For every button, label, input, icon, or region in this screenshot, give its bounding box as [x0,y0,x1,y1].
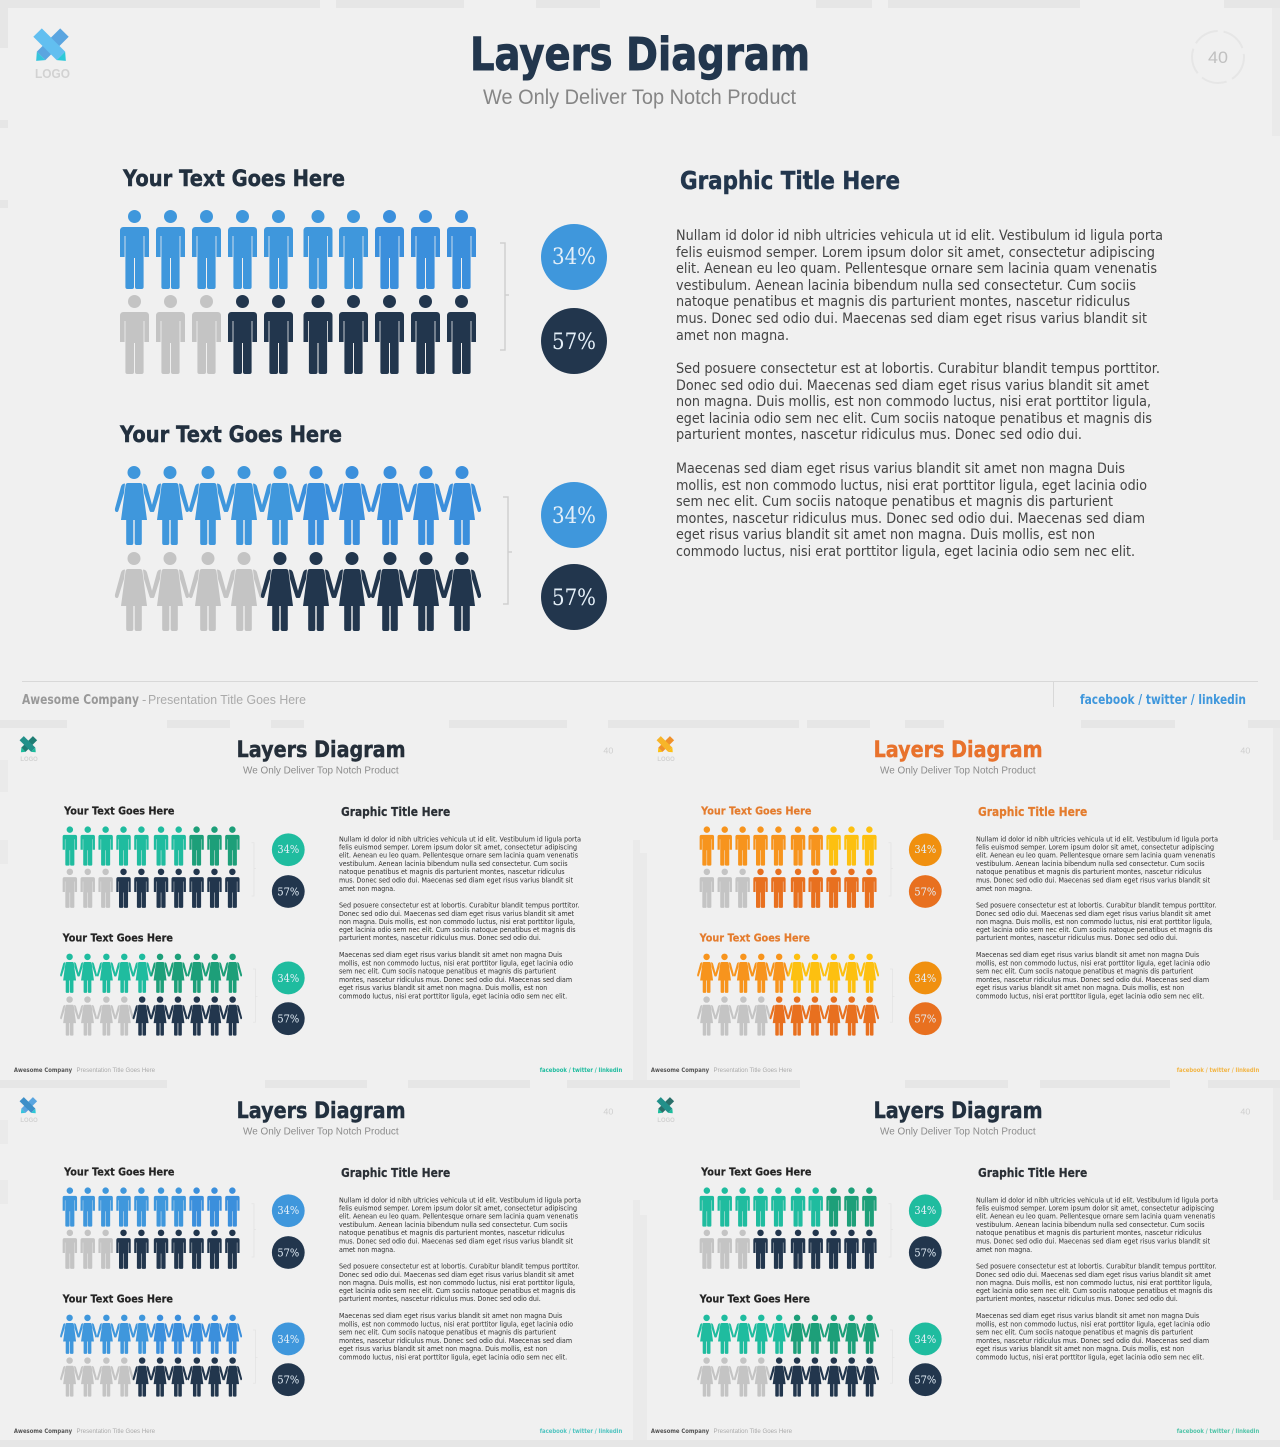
graphic title: Graphic Title Here [978,1165,1087,1180]
body text: non magna. Duis mollis, est non commodo luctus, nisi erat porttitor ligula, [339,917,575,926]
footer links: facebook / twitter / linkedin [1177,1066,1260,1074]
body text: parturient montes, nascetur ridiculus mus. Donec sed odio dui. [339,933,541,942]
pictogram: women row 1 [697,954,879,993]
icon: logo: LOGO [20,756,38,763]
body text: eget risus varius blandit sit amet non magna. Duis mollis, est non [976,983,1184,992]
heading: men chart: Your Text Goes Here [700,804,811,817]
icon: logo: LOGO [657,1117,675,1124]
stat: 57% men [272,1236,305,1269]
body text: Nullam id dolor id nibh ultricies vehicula ut id elit. Vestibulum id ligula porta [339,834,581,843]
stat: 34% women: 34% [914,972,936,985]
title: Layers Diagram [874,1098,1043,1124]
stat: 34% men: 34% [277,843,299,856]
heading: women chart: Your Text Goes Here [62,1293,173,1306]
title: Layers Diagram [237,1098,406,1124]
page number badge: 40 [1208,48,1228,67]
pictogram: men row 2 [700,869,877,908]
body text: sem nec elit. Cum sociis natoque penatibus et magnis dis parturient [976,966,1193,975]
bracket: women [890,969,894,1022]
body text: eget lacinia odio sem nec elit. Cum sociis natoque penatibus et magnis dis [976,1286,1213,1295]
body text: mus. Donec sed odio dui. Maecenas sed diam eget risus varius blandit sit [976,876,1210,885]
body text: non magna. Duis mollis, est non commodo luctus, nisi erat porttitor ligula, [976,917,1212,926]
page number: 40 [1240,1106,1251,1116]
icon: logo: LOGO [35,66,70,81]
stat: 57% men [541,308,607,374]
body text: natoque penatibus et magnis dis parturient montes, nascetur ridiculus [339,1228,565,1237]
stat: 57% women [272,1363,305,1396]
body text: Maecenas sed diam eget risus varius blandit sit amet non magna Duis [339,1311,562,1320]
graphic title: Graphic Title Here [978,804,1087,819]
body text: eget risus varius blandit sit amet non magna. Duis mollis, est non [976,1344,1184,1353]
heading: men chart: Your Text Goes Here [63,804,174,817]
stat: 34% men: 34% [552,245,596,270]
footer left [14,1066,155,1074]
body text: Sed posuere consectetur est at lobortis. Curabitur blandit tempus porttitor. [339,900,580,909]
stat: 57% men [272,875,305,908]
stat: 57% women: 57% [277,1374,299,1387]
body text: mollis, est non commodo luctus, nisi erat porttitor ligula, eget lacinia odio [976,959,1210,968]
pictogram: men row 2 [63,1230,240,1269]
body text: elit. Aenean eu leo quam. Pellentesque ornare sem lacinia quam venenatis [339,851,578,860]
body text: eget lacinia odio sem nec elit. Cum sociis natoque penatibus et magnis dis [976,925,1213,934]
body text: commodo luctus, nisi erat porttitor ligula, eget lacinia odio sem nec elit. [339,1352,567,1361]
footer left [651,1427,792,1435]
body text: eget lacinia odio sem nec elit. Cum sociis natoque penatibus et magnis dis [339,925,576,934]
stat: 34% women [909,1323,942,1355]
pictogram: women row 2 [697,1357,879,1397]
body text: Nullam id dolor id nibh ultricies vehicula ut id elit. Vestibulum id ligula porta [339,1195,581,1204]
bracket: women [253,1330,257,1383]
page number badge [1192,31,1244,83]
stat: 34% men [909,833,942,866]
body text: vestibulum. Aenean lacinia bibendum nulla sed consectetur. Cum sociis [676,278,1136,294]
stat: 57% women [909,1363,942,1396]
subtitle: We Only Deliver Top Notch Product [243,766,399,777]
body text [339,1195,581,1361]
footer left [22,692,306,708]
stat: 57% women: 57% [552,586,596,611]
body text: natoque penatibus et magnis dis parturient montes, nascetur ridiculus [339,867,565,876]
body text: sem nec elit. Cum sociis natoque penatibus et magnis dis parturient [339,1327,556,1336]
footer links: facebook / twitter / linkedin [540,1066,623,1074]
subtitle: We Only Deliver Top Notch Product [243,1127,399,1138]
body text: felis euismod semper. Lorem ipsum dolor sit amet, consectetur adipiscing [339,843,577,852]
stat: 34% men [541,224,607,290]
stat: 34% men [272,1194,305,1227]
body text [339,834,581,1000]
stat: 57% men: 57% [277,885,299,898]
pictogram: men row 1 [700,826,877,866]
heading: men chart: Your Text Goes Here [63,1165,174,1178]
body text: elit. Aenean eu leo quam. Pellentesque ornare sem lacinia quam venenatis [976,851,1215,860]
body text: vestibulum. Aenean lacinia bibendum nulla sed consectetur. Cum sociis [976,1220,1205,1229]
subtitle: We Only Deliver Top Notch Product [483,86,796,109]
stat: 57% men [909,1236,942,1269]
footer left: - [142,692,146,707]
body text: Maecenas sed diam eget risus varius blandit sit amet non magna Duis [976,950,1199,959]
stat: 34% women: 34% [277,1333,299,1346]
body text: amet non magna. [339,1245,395,1254]
stat: 57% women [909,1002,942,1035]
footer left: Presentation Title Goes Here [714,1067,792,1074]
body text: natoque penatibus et magnis dis parturient montes, nascetur ridiculus [676,294,1130,310]
footer left: Awesome Company [22,693,139,708]
graphic title: Graphic Title Here [341,1165,450,1180]
bracket: men [888,1204,893,1257]
body text: mus. Donec sed odio dui. Maecenas sed diam eget risus varius blandit sit [339,876,573,885]
stat: 57% women: 57% [914,1374,936,1387]
stat: 57% women [272,1002,305,1035]
body text: eget lacinia odio sem nec elit. Cum sociis natoque penatibus et magnis dis [339,1286,576,1295]
heading: women chart: Your Text Goes Here [699,1293,810,1306]
stat: 34% men [909,1194,942,1227]
body text: amet non magna. [339,884,395,893]
title: Layers Diagram [874,737,1043,763]
body text: amet non magna. [976,884,1032,893]
stat: 34% women: 34% [914,1333,936,1346]
body text: commodo luctus, nisi erat porttitor ligula, eget lacinia odio sem nec elit. [976,1352,1204,1361]
bracket: women [890,1330,894,1383]
body text: parturient montes, nascetur ridiculus mus. Donec sed odio dui. [976,933,1178,942]
pictogram: men row 2 [63,869,240,908]
heading: men chart: Your Text Goes Here [122,167,345,192]
body text: parturient montes, nascetur ridiculus mus. Donec sed odio dui. [976,1294,1178,1303]
icon: logo [656,1097,675,1124]
bracket: women [503,497,512,604]
body text: eget risus varius blandit sit amet non magna. Duis mollis, est non [339,983,547,992]
stat: 57% men: 57% [277,1246,299,1259]
body text: montes, nascetur ridiculus mus. Donec sed odio dui. Maecenas sed diam [676,511,1145,527]
body text: amet non magna. [676,328,789,344]
heading: women chart: Your Text Goes Here [62,932,173,945]
page number: 40 [603,745,614,755]
bracket: women [253,969,257,1022]
body text: felis euismod semper. Lorem ipsum dolor sit amet, consectetur adipiscing [339,1204,577,1213]
body text: felis euismod semper. Lorem ipsum dolor sit amet, consectetur adipiscing [676,245,1155,261]
pictogram: men row 1 [120,210,476,289]
footer links: facebook / twitter / linkedin [1177,1427,1260,1435]
body text: mollis, est non commodo luctus, nisi erat porttitor ligula, eget lacinia odio [976,1320,1210,1329]
body text: amet non magna. [976,1245,1032,1254]
body text: mus. Donec sed odio dui. Maecenas sed diam eget risus varius blandit sit [339,1237,573,1246]
pictogram: men row 2 [120,295,476,374]
footer left: Awesome Company [651,1427,710,1435]
body text: non magna. Duis mollis, est non commodo luctus, nisi erat porttitor ligula, [339,1278,575,1287]
pictogram: women row 2 [697,996,879,1036]
bracket: men [252,1204,256,1257]
footer left: Awesome Company [14,1066,73,1074]
pictogram: men row 1 [63,1187,240,1227]
footer left [651,1066,792,1074]
icon: logo [32,28,70,81]
stat: 34% women [272,1323,305,1355]
body text: sem nec elit. Cum sociis natoque penatibus et magnis dis parturient [676,494,1113,510]
icon: logo: LOGO [657,756,675,763]
body text: elit. Aenean eu leo quam. Pellentesque ornare sem lacinia quam venenatis [676,261,1157,277]
body text: montes, nascetur ridiculus mus. Donec sed odio dui. Maecenas sed diam [339,975,572,984]
heading: men chart: Your Text Goes Here [700,1165,811,1178]
title: Layers Diagram [237,737,406,763]
footer links: facebook / twitter / linkedin [540,1427,623,1435]
body text: mollis, est non commodo luctus, nisi erat porttitor ligula, eget lacinia odio [339,959,573,968]
panel: small slide teal 2 [651,1097,1260,1435]
body text: commodo luctus, nisi erat porttitor ligula, eget lacinia odio sem nec elit. [339,991,567,1000]
footer left: Presentation Title Goes Here [714,1428,792,1435]
body text: Sed posuere consectetur est at lobortis. Curabitur blandit tempus porttitor. [339,1261,580,1270]
pictogram: men row 1 [63,826,240,866]
footer left: Presentation Title Goes Here [77,1067,155,1074]
body text: Donec sed odio dui. Maecenas sed diam eget risus varius blandit sit amet [339,1270,574,1279]
page number: 40 [603,1106,614,1116]
stat: 34% women: 34% [277,972,299,985]
subtitle: We Only Deliver Top Notch Product [880,766,1036,777]
bracket: men [500,243,509,350]
body text: non magna. Duis mollis, est non commodo luctus, nisi erat porttitor ligula, [976,1278,1212,1287]
stat: 34% women [541,482,607,548]
body text: Donec sed odio dui. Maecenas sed diam eget risus varius blandit sit amet [676,378,1149,394]
icon: logo [656,736,675,763]
pictogram: women row 1 [60,954,242,993]
body text: Nullam id dolor id nibh ultricies vehicula ut id elit. Vestibulum id ligula porta [976,834,1218,843]
body text: mus. Donec sed odio dui. Maecenas sed diam eget risus varius blandit sit [676,311,1147,327]
body text: eget risus varius blandit sit amet non magna. Duis mollis, est non [339,1344,547,1353]
body text: vestibulum. Aenean lacinia bibendum nulla sed consectetur. Cum sociis [339,859,568,868]
body text: Donec sed odio dui. Maecenas sed diam eget risus varius blandit sit amet [976,909,1211,918]
panel: small slide blue [14,1097,623,1435]
pictogram: women row 2 [60,996,242,1036]
body text: commodo luctus, nisi erat porttitor ligula, eget lacinia odio sem nec elit. [676,544,1135,560]
body text: Sed posuere consectetur est at lobortis. Curabitur blandit tempus porttitor. [676,361,1160,377]
heading: women chart: Your Text Goes Here [119,423,342,448]
body text [976,834,1218,1000]
stat: 34% men: 34% [914,843,936,856]
stat: 57% women [541,564,607,630]
stat: 34% women [272,962,305,994]
panel: main slide (blue) [22,28,1258,708]
body text: montes, nascetur ridiculus mus. Donec sed odio dui. Maecenas sed diam [976,1336,1209,1345]
body text: mollis, est non commodo luctus, nisi erat porttitor ligula, eget lacinia odio [676,478,1147,494]
stat: 57% men: 57% [914,885,936,898]
body text [976,1195,1218,1361]
icon: logo [19,1097,38,1124]
body text: sem nec elit. Cum sociis natoque penatibus et magnis dis parturient [339,966,556,975]
footer left: Awesome Company [651,1066,710,1074]
body text: parturient montes, nascetur ridiculus mus. Donec sed odio dui. [676,427,1082,443]
body text: elit. Aenean eu leo quam. Pellentesque ornare sem lacinia quam venenatis [976,1212,1215,1221]
body text: Maecenas sed diam eget risus varius blandit sit amet non magna Duis [339,950,562,959]
pictogram: women row 1 [60,1315,242,1354]
body text: vestibulum. Aenean lacinia bibendum nulla sed consectetur. Cum sociis [976,859,1205,868]
body text: Sed posuere consectetur est at lobortis. Curabitur blandit tempus porttitor. [976,1261,1217,1270]
body text: mollis, est non commodo luctus, nisi erat porttitor ligula, eget lacinia odio [339,1320,573,1329]
stat: 57% men: 57% [552,330,596,355]
pictogram: women row 1 [115,466,481,545]
footer links: facebook / twitter / linkedin [1080,693,1246,708]
panel: small slide orange [651,736,1260,1074]
body text: montes, nascetur ridiculus mus. Donec sed odio dui. Maecenas sed diam [976,975,1209,984]
pictogram: women row 2 [115,552,481,631]
body text: felis euismod semper. Lorem ipsum dolor sit amet, consectetur adipiscing [976,1204,1214,1213]
page number: 40 [1240,745,1251,755]
body text: Nullam id dolor id nibh ultricies vehicula ut id elit. Vestibulum id ligula porta [976,1195,1218,1204]
stat: 57% women: 57% [914,1013,936,1026]
stat: 34% men: 34% [277,1204,299,1217]
stat: 34% men: 34% [914,1204,936,1217]
body text: Nullam id dolor id nibh ultricies vehicula ut id elit. Vestibulum id ligula porta [676,228,1163,244]
footer left: Awesome Company [14,1427,73,1435]
body text: montes, nascetur ridiculus mus. Donec sed odio dui. Maecenas sed diam [339,1336,572,1345]
stat: 57% men [909,875,942,908]
body text: eget lacinia odio sem nec elit. Cum sociis natoque penatibus et magnis dis [676,411,1152,427]
footer left: Presentation Title Goes Here [77,1428,155,1435]
body text: commodo luctus, nisi erat porttitor ligula, eget lacinia odio sem nec elit. [976,991,1204,1000]
body text: natoque penatibus et magnis dis parturient montes, nascetur ridiculus [976,1228,1202,1237]
body text: Donec sed odio dui. Maecenas sed diam eget risus varius blandit sit amet [976,1270,1211,1279]
bracket: men [888,843,893,896]
title: Layers Diagram [470,28,810,81]
stat: 34% men [272,833,305,866]
body text: vestibulum. Aenean lacinia bibendum nulla sed consectetur. Cum sociis [339,1220,568,1229]
body text: mus. Donec sed odio dui. Maecenas sed diam eget risus varius blandit sit [976,1237,1210,1246]
body text [676,228,1163,560]
body text: elit. Aenean eu leo quam. Pellentesque ornare sem lacinia quam venenatis [339,1212,578,1221]
body text: non magna. Duis mollis, est non commodo luctus, nisi erat porttitor ligula, [676,394,1151,410]
stat: 34% women: 34% [552,504,596,529]
body text: Donec sed odio dui. Maecenas sed diam eget risus varius blandit sit amet [339,909,574,918]
pictogram: men row 2 [700,1230,877,1269]
bracket: men [252,843,256,896]
heading: women chart: Your Text Goes Here [699,932,810,945]
body text: Sed posuere consectetur est at lobortis. Curabitur blandit tempus porttitor. [976,900,1217,909]
body text: parturient montes, nascetur ridiculus mus. Donec sed odio dui. [339,1294,541,1303]
icon: logo [19,736,38,763]
panel: small slide teal [14,736,623,1074]
footer left [14,1427,155,1435]
footer left: Presentation Title Goes Here [148,692,306,707]
stat: 57% women: 57% [277,1013,299,1026]
body text: eget risus varius blandit sit amet non magna. Duis mollis, est non [676,527,1095,543]
pictogram: men row 1 [700,1187,877,1227]
graphic title: Graphic Title Here [680,166,900,195]
pictogram: women row 2 [60,1357,242,1397]
body text: natoque penatibus et magnis dis parturient montes, nascetur ridiculus [976,867,1202,876]
stat: 34% women [909,962,942,994]
pictogram: women row 1 [697,1315,879,1354]
body text: Maecenas sed diam eget risus varius blandit sit amet non magna Duis [976,1311,1199,1320]
body text: felis euismod semper. Lorem ipsum dolor sit amet, consectetur adipiscing [976,843,1214,852]
stat: 57% men: 57% [914,1246,936,1259]
body text: sem nec elit. Cum sociis natoque penatibus et magnis dis parturient [976,1327,1193,1336]
body text: Maecenas sed diam eget risus varius blandit sit amet non magna Duis [676,461,1125,477]
graphic title: Graphic Title Here [341,804,450,819]
icon: logo: LOGO [20,1117,38,1124]
subtitle: We Only Deliver Top Notch Product [880,1127,1036,1138]
